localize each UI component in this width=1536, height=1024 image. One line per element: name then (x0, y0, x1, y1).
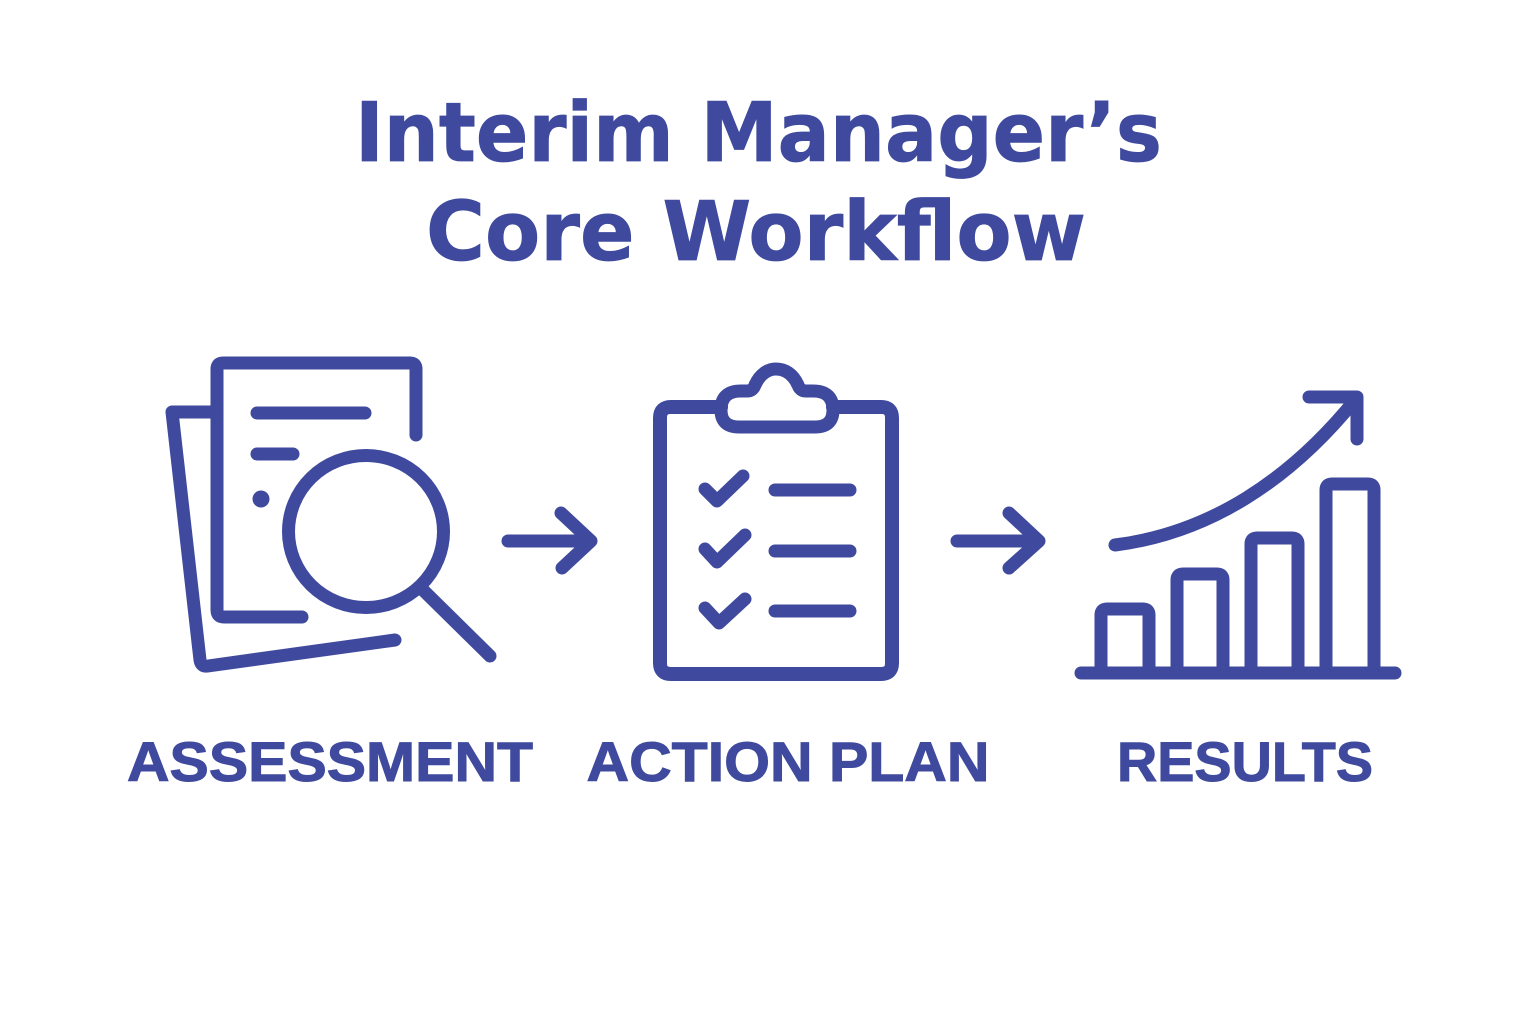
icon: documents with magnifying glass (172, 363, 490, 666)
label: results: RESULTS (1117, 730, 1373, 793)
label: assessment: ASSESSMENT (127, 730, 533, 793)
icon: rising bar chart (1081, 397, 1395, 673)
label: action plan: ACTION PLAN (586, 730, 990, 793)
title (355, 86, 1162, 280)
title: Interim Manager’s (355, 86, 1162, 181)
icon: clipboard with checklist (660, 369, 892, 674)
arrow: action plan to results (957, 513, 1039, 568)
title: Core Workflow (426, 185, 1086, 280)
arrow: assessment to action plan (508, 513, 591, 568)
